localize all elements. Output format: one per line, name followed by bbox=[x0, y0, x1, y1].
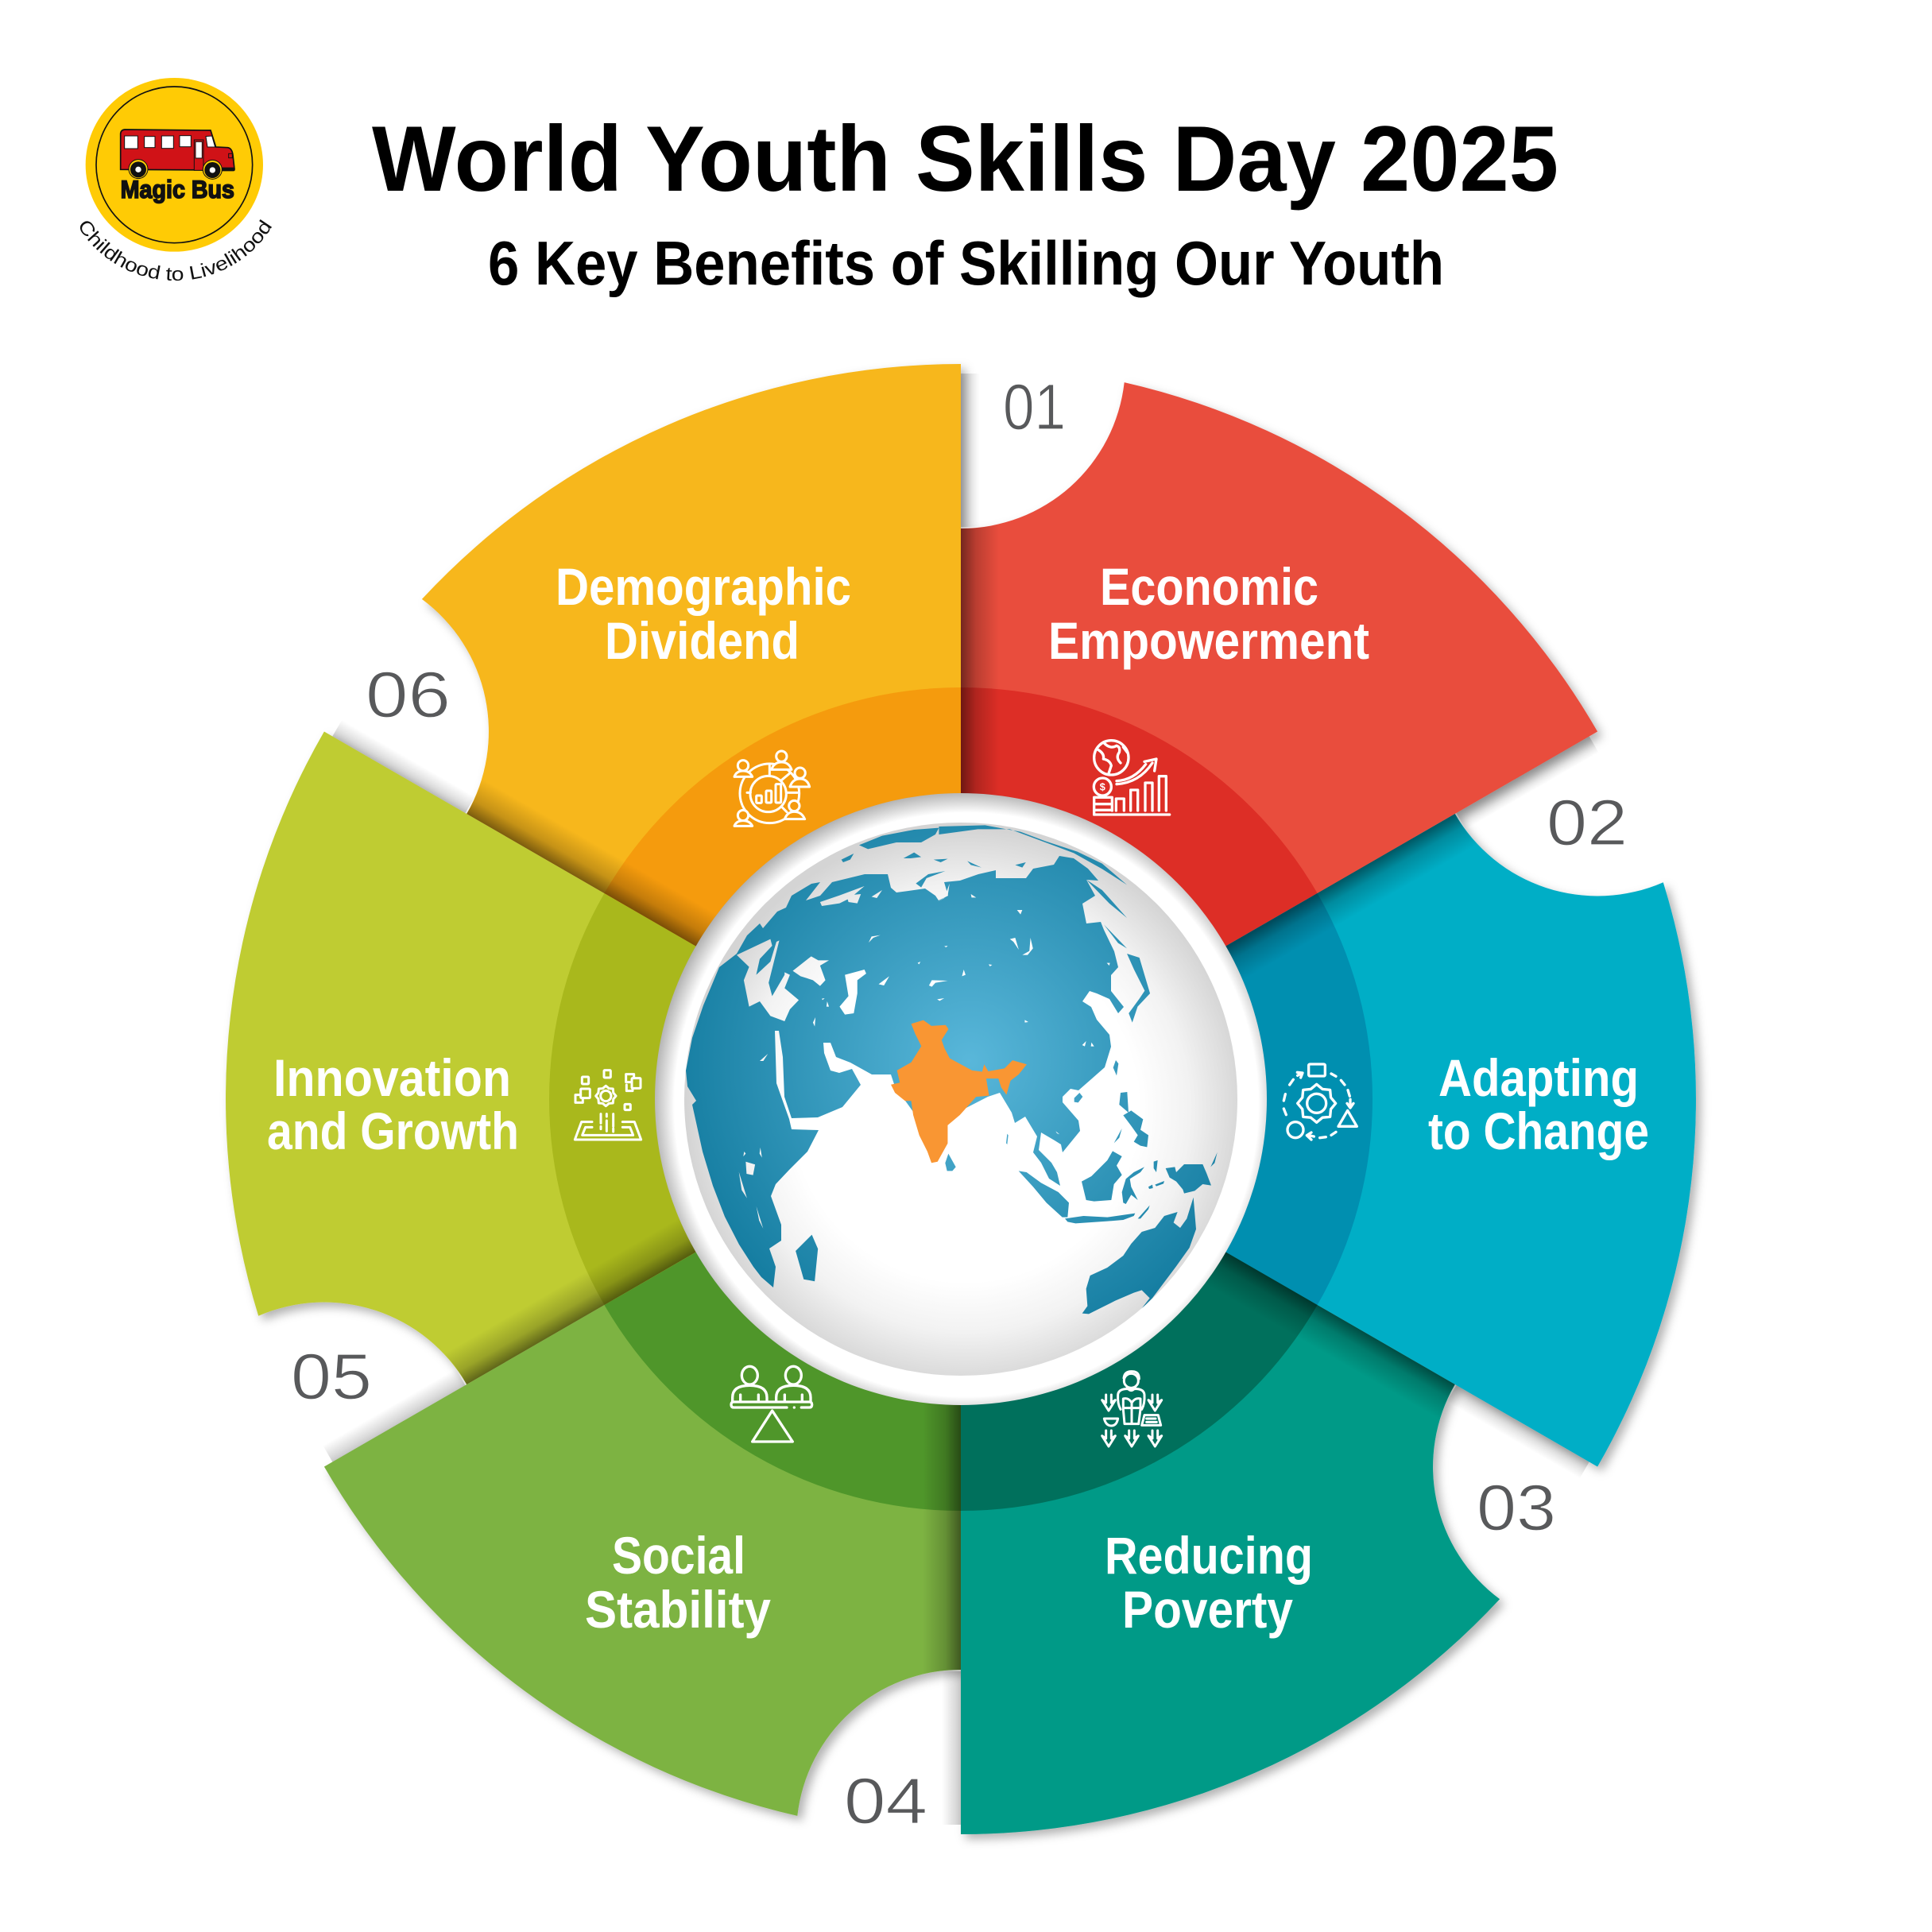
panel: 01 economic empowerment bbox=[961, 382, 1597, 1099]
heading: Reducing Poverty: Poverty bbox=[1122, 1580, 1293, 1639]
number 01: 01 bbox=[1003, 371, 1066, 443]
title: World Youth Skills Day 2025 bbox=[372, 106, 1558, 211]
heading: Social Stability: Stability bbox=[585, 1580, 771, 1639]
heading: Social Stability bbox=[585, 1526, 771, 1639]
globe landmasses bbox=[686, 825, 1218, 1314]
heading: Reducing Poverty: Reducing bbox=[1105, 1526, 1313, 1585]
globe sphere bbox=[684, 823, 1237, 1376]
heading: Adapting to Change: to Change bbox=[1428, 1102, 1649, 1160]
heading: Innovation and Growth: Innovation bbox=[273, 1048, 511, 1107]
wheel: six benefit segments bbox=[226, 364, 1696, 1834]
logo black ring bbox=[96, 87, 253, 243]
icon: balance scale with two people bbox=[731, 1366, 812, 1442]
icon: adapting cycle with gear bbox=[1283, 1064, 1357, 1140]
icon: person reading with down arrows bbox=[1102, 1372, 1162, 1446]
heading: Economic Empowerment: Economic bbox=[1100, 557, 1318, 616]
heading: Reducing Poverty bbox=[1105, 1526, 1313, 1639]
icon: people around a chart ring bbox=[734, 751, 810, 826]
India highlighted bbox=[891, 1020, 1027, 1163]
heading: Economic Empowerment: Empowerment bbox=[1048, 611, 1369, 670]
number 04: 04 bbox=[844, 1765, 927, 1837]
heading: Innovation and Growth: and Growth bbox=[267, 1102, 519, 1160]
panel: 04 social stability bbox=[324, 1099, 961, 1816]
panel: 02 adapting to change bbox=[961, 814, 1696, 1467]
heading: Social Stability: Social bbox=[612, 1526, 745, 1585]
logo tagline: Childhood to Livelihood bbox=[79, 219, 272, 281]
icon: red bus bbox=[121, 130, 235, 179]
icon: globe, coins and growth chart bbox=[1094, 741, 1170, 815]
logo yellow badge bbox=[86, 78, 263, 252]
globe bbox=[684, 823, 1237, 1376]
icon: innovation gear and platform bbox=[575, 1071, 641, 1140]
heading: Demographic Dividend: Demographic bbox=[556, 557, 851, 616]
number 06: 06 bbox=[366, 659, 451, 731]
heading: Economic Empowerment bbox=[1048, 557, 1369, 670]
heading: Demographic Dividend: Dividend bbox=[605, 611, 800, 670]
panel: 05 innovation and growth bbox=[226, 731, 961, 1384]
logo: Magic Bus bbox=[79, 78, 272, 281]
icon: globe, coins and growth chart: $ bbox=[1100, 781, 1105, 792]
number 02: 02 bbox=[1547, 787, 1628, 859]
white globe ring bbox=[655, 793, 1267, 1405]
heading: Adapting to Change: Adapting bbox=[1438, 1048, 1639, 1107]
number 05: 05 bbox=[291, 1341, 372, 1413]
heading: Demographic Dividend bbox=[556, 557, 851, 670]
heading: Adapting to Change bbox=[1428, 1048, 1649, 1160]
subtitle: 6 Key Benefits of Skilling Our Youth bbox=[488, 228, 1444, 298]
logo wordmark: Magic Bus bbox=[121, 176, 234, 203]
number 03: 03 bbox=[1477, 1472, 1556, 1544]
heading: Innovation and Growth bbox=[267, 1048, 519, 1160]
panel: 03 reducing poverty bbox=[961, 1099, 1500, 1834]
panel: 06 demographic dividend bbox=[422, 364, 961, 1099]
